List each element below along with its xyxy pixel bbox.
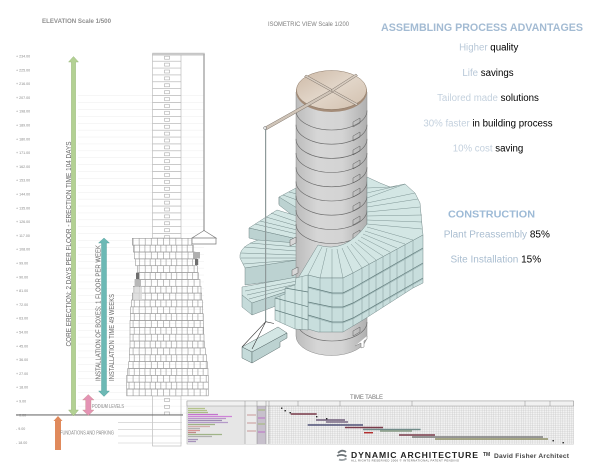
level labels: + 18.00 <box>16 386 28 390</box>
list of advantages <box>423 42 553 154</box>
roof disc <box>296 70 367 112</box>
crane arm and cross beams <box>264 74 358 322</box>
level labels: - 9.00 <box>16 427 25 431</box>
label: installation of boxes: INSTALLATION OF BOXES: 1 FLOOR PER WEEK <box>95 245 102 381</box>
level labels <box>16 54 30 445</box>
back upper-left wing <box>249 188 297 250</box>
trademark: TM <box>483 452 490 458</box>
level labels: + 81.00 <box>16 289 28 293</box>
lifted prefabricated box <box>242 322 287 363</box>
construction shares <box>444 230 550 266</box>
core cylinder <box>290 92 367 356</box>
level labels: + 36.00 <box>16 358 28 362</box>
level labels: + 0.00 <box>16 413 26 417</box>
level labels: + 189.00 <box>16 124 30 128</box>
arrow: foundations <box>54 416 62 450</box>
gantt bars <box>291 414 548 439</box>
level labels: + 27.00 <box>16 372 28 376</box>
label: core erection: CORE ERECTION: 2 DAYS PER FLOOR - ERECTION TIME 104 DAYS <box>64 141 73 346</box>
architect name: David Fisher Architect <box>494 453 570 460</box>
level labels: + 72.00 <box>16 303 28 307</box>
gantt chart <box>187 401 574 444</box>
level labels: + 144.00 <box>16 192 30 196</box>
heading: elevation: ELEVATION Scale 1/500 <box>42 18 111 25</box>
arrow: core erection <box>68 56 78 416</box>
level labels: + 162.00 <box>16 165 30 169</box>
level labels: + 198.00 <box>16 110 30 114</box>
level labels: + 54.00 <box>16 330 28 334</box>
list of advantages: 10% cost saving <box>453 144 523 154</box>
arrow: installation of boxes <box>98 238 110 396</box>
level labels: + 180.00 <box>16 137 30 141</box>
level labels: + 234.00 <box>16 54 30 58</box>
level labels: + 45.00 <box>16 344 28 348</box>
logo mark <box>337 451 346 460</box>
level labels: + 117.00 <box>16 234 30 238</box>
heading: isometric view: ISOMETRIC VIEW Scale 1/200 <box>268 21 350 28</box>
level labels: + 99.00 <box>16 262 28 266</box>
level labels: + 225.00 <box>16 68 30 72</box>
construction shares: Site Installation 15% <box>450 254 541 266</box>
gantt milestones <box>281 408 564 443</box>
level labels: + 207.00 <box>16 96 30 100</box>
list of advantages: Tailored made solutions <box>437 93 539 104</box>
front left stepped side <box>275 275 308 332</box>
heading: time table: TIME TABLE <box>350 395 383 401</box>
elevation drawing <box>16 53 216 446</box>
level labels: + 135.00 <box>16 206 30 210</box>
front right fan <box>297 177 423 280</box>
arrow: podium levels <box>83 394 94 416</box>
level labels: + 63.00 <box>16 317 28 321</box>
level labels: + 108.00 <box>16 248 30 252</box>
level labels: + 216.00 <box>16 82 30 86</box>
label: podium levels: PODIUM LEVELS <box>92 404 124 410</box>
back middle-left wing <box>240 240 297 315</box>
construction shares: Plant Preassembly 85% <box>444 230 550 240</box>
isometric building <box>240 70 423 363</box>
label: foundations and parking: FUNDATIONS AND PARKING <box>60 430 114 436</box>
rights line: ALL RIGHTS RESERVED 2006 © INTERNATIONAL PATENT PENDING <box>351 458 459 462</box>
level labels: + 171.00 <box>16 151 30 155</box>
level labels: + 90.00 <box>16 275 28 279</box>
level labels: - 18.00 <box>16 441 27 445</box>
list of advantages: Life savings <box>462 68 514 79</box>
front main side tiers <box>308 235 423 340</box>
brand name: DYNAMIC ARCHITECTURE <box>351 450 478 460</box>
level labels: + 9.00 <box>16 400 26 404</box>
list of advantages: Higher quality <box>459 42 518 54</box>
level labels: + 126.00 <box>16 220 30 224</box>
list of advantages: 30% faster in building process <box>423 118 553 130</box>
heading: construction: CONSTRUCTION <box>448 210 535 220</box>
title: assembling process advantages: ASSEMBLING PROCESS ADVANTAGES <box>381 22 583 34</box>
label: installation time: INSTALLATION TIME 49 WEEKS <box>109 294 116 381</box>
level labels: + 153.00 <box>16 179 30 183</box>
